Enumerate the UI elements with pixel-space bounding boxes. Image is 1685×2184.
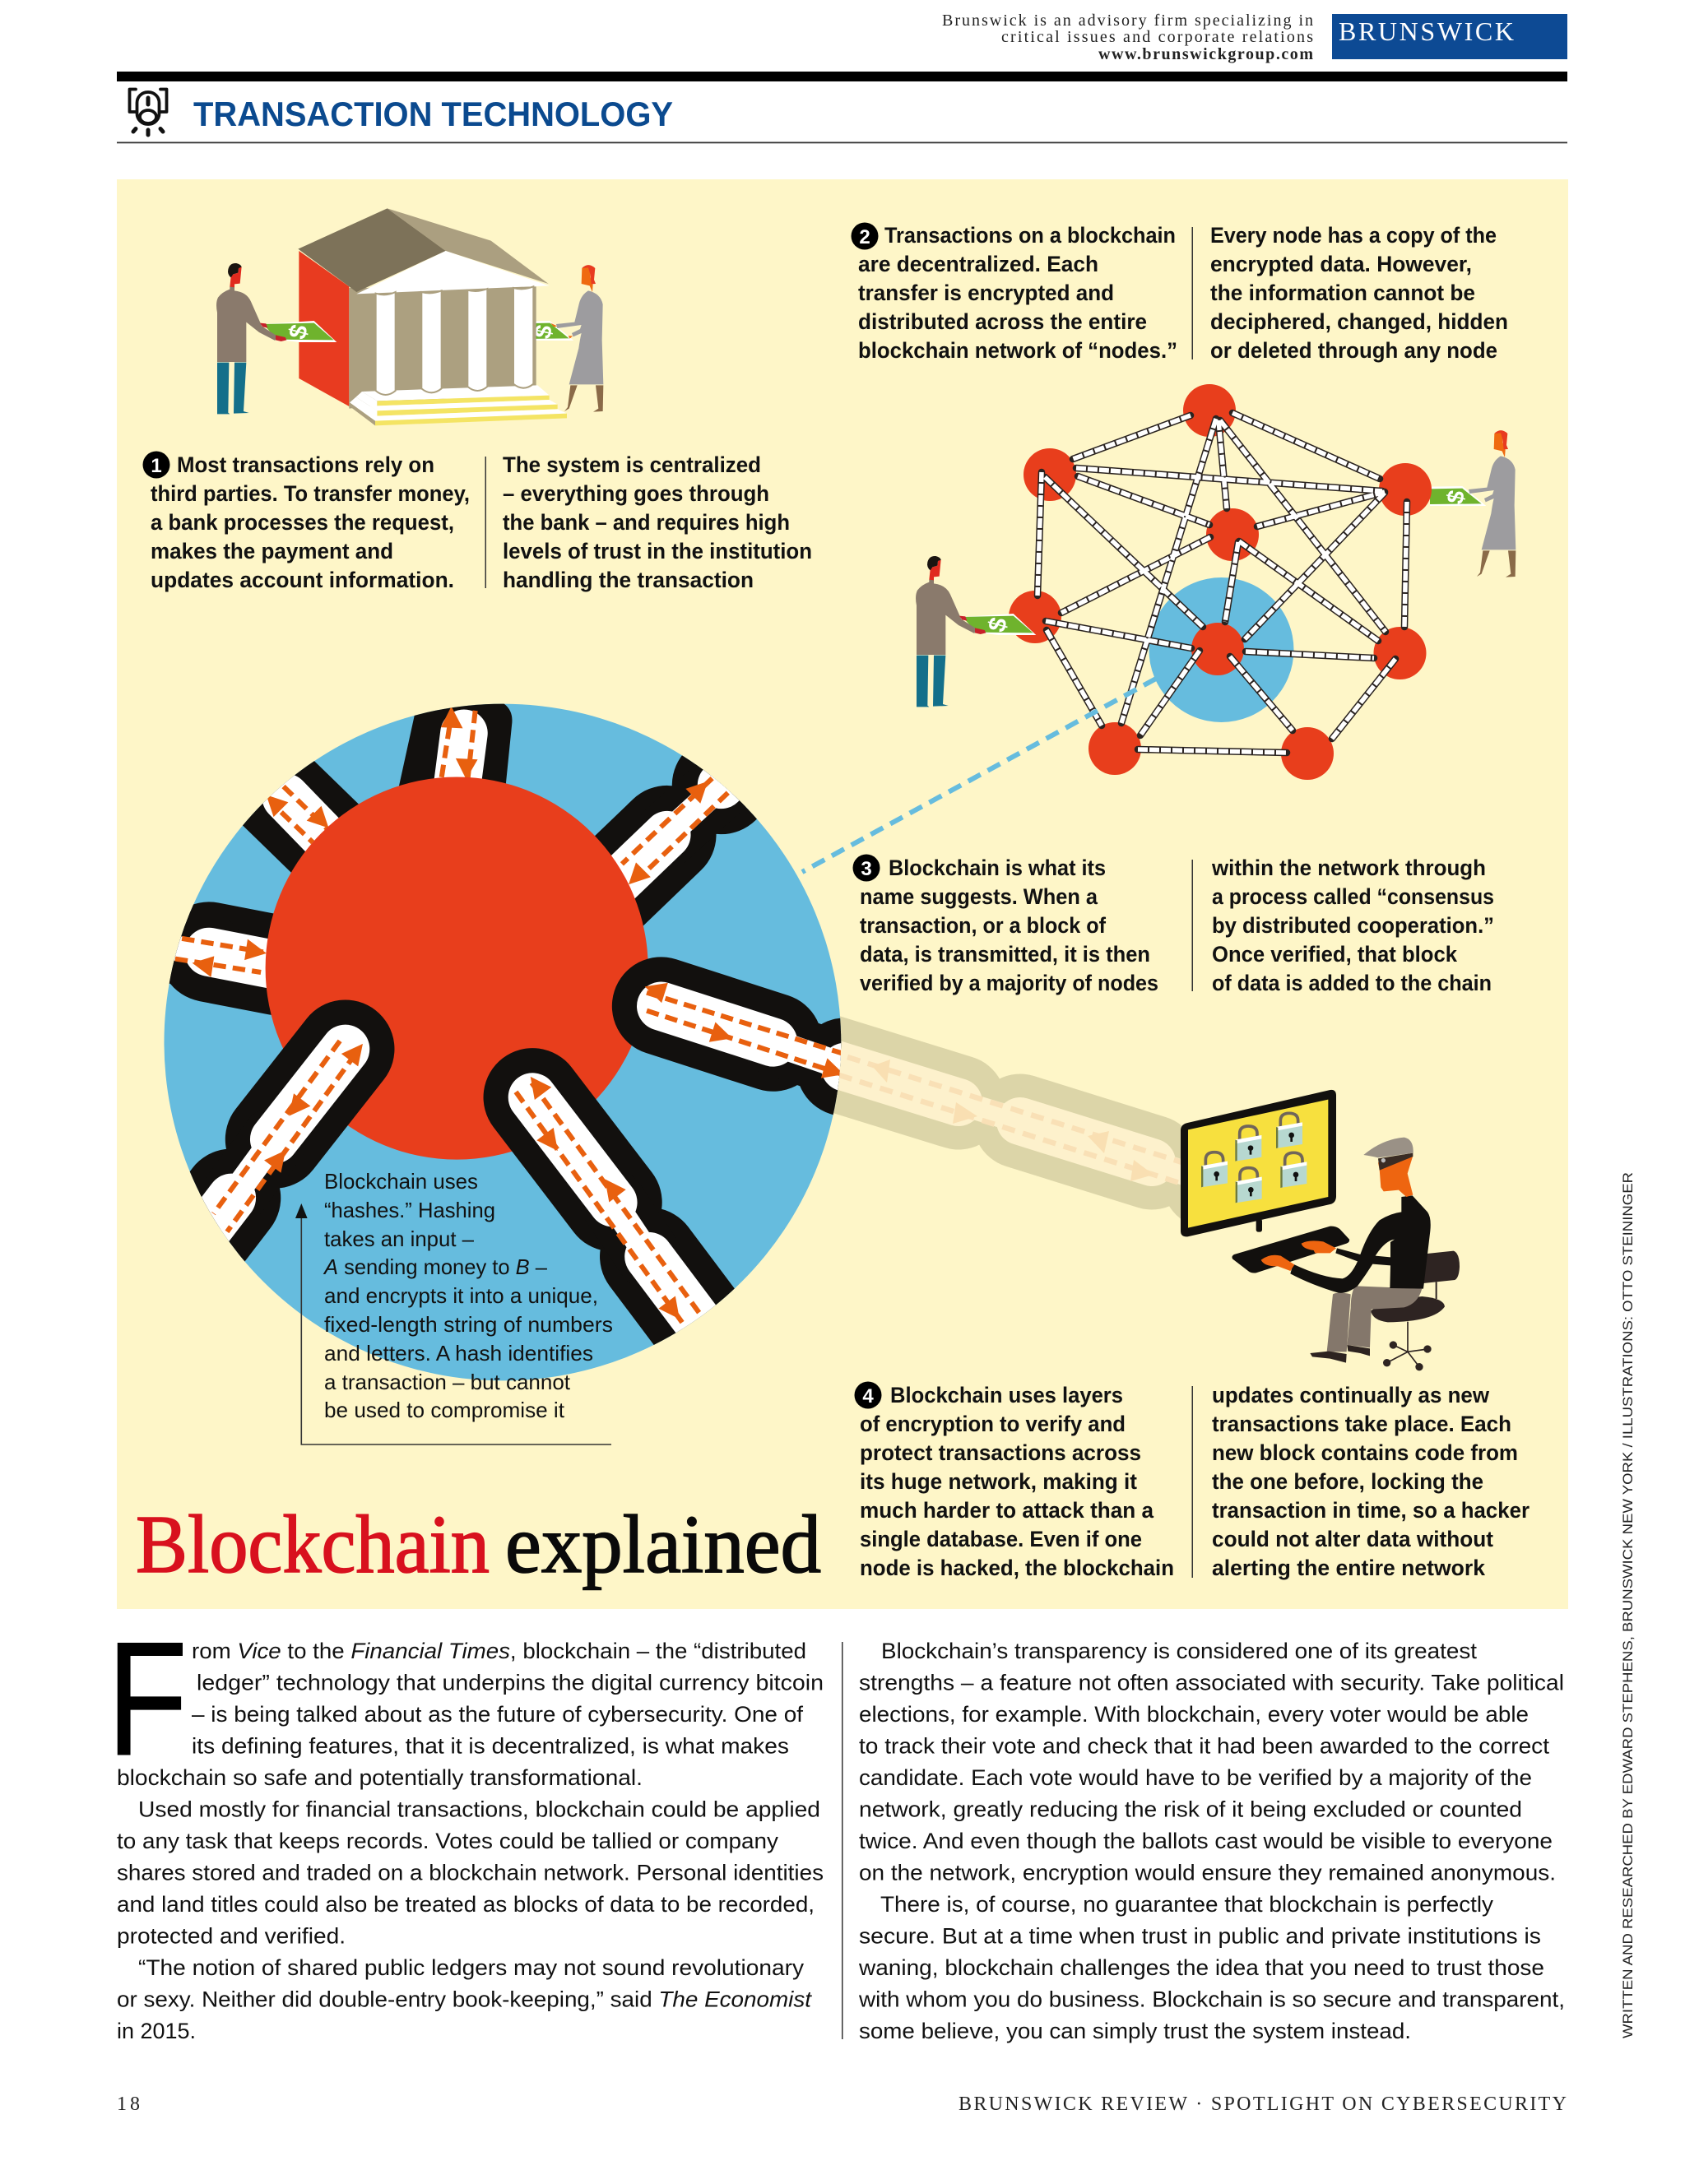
hacker mask xyxy=(1378,1153,1413,1171)
body text: left column: blockchain so safe and potentially transformational. xyxy=(117,1765,643,1790)
hash callout text: A sending money to B – xyxy=(323,1254,548,1279)
body text: left column: or sexy. Neither did double-entry book-keeping,” said The Economist xyxy=(117,1987,813,2012)
big circle detail xyxy=(164,704,841,1380)
number badge 1: 1 xyxy=(151,455,162,477)
step 4 text: transactions take place. Each xyxy=(1212,1412,1511,1436)
number badge 3 xyxy=(852,854,880,882)
hacker body xyxy=(1290,1195,1431,1293)
body text: left column: in 2015. xyxy=(117,2019,196,2043)
step 4 text: new block contains code from xyxy=(1212,1440,1518,1465)
hash callout text: fixed-length string of numbers xyxy=(324,1312,613,1337)
step 2 text: deciphered, changed, hidden xyxy=(1210,309,1508,334)
step 2 text: distributed across the entire xyxy=(858,309,1147,334)
man at network: $ xyxy=(983,614,1013,635)
body text: right column: Blockchain’s transparency is considered one of its greatest xyxy=(881,1639,1478,1663)
step 4 text: of encryption to verify and xyxy=(860,1412,1126,1436)
step 4 text: transaction in time, so a hacker xyxy=(1212,1498,1529,1523)
number badge 1 xyxy=(143,451,169,479)
step 4 text: single database. Even if one xyxy=(860,1527,1142,1551)
chain under hub: top-right xyxy=(595,755,757,926)
step 1 text: a bank processes the request, xyxy=(151,510,454,535)
masthead note xyxy=(942,12,1313,63)
step 1 text xyxy=(143,451,812,592)
body text: left column: its defining features, that it is decentralized, is what makes xyxy=(192,1734,789,1759)
bank columns xyxy=(376,286,533,395)
network chain links: outline xyxy=(1037,413,1407,753)
red hub xyxy=(266,777,648,1160)
body text: left column: to any task that keeps records. Votes could be tallied or company xyxy=(117,1829,779,1853)
step 3 text: of data is added to the chain xyxy=(1212,971,1492,995)
footer: BRUNSWICK REVIEW · SPOTLIGHT ON CYBERSECURITY xyxy=(959,2094,1567,2115)
step 1 text: third parties. To transfer money, xyxy=(151,481,470,506)
hash callout text: Blockchain uses xyxy=(324,1169,478,1194)
body text: left column: ledger” technology that underpins the digital currency bitcoin xyxy=(197,1670,824,1695)
panel: yellow background xyxy=(117,179,1568,1609)
monitor xyxy=(1181,1090,1336,1236)
number badge 2 xyxy=(851,222,879,250)
heading rule xyxy=(117,141,1567,143)
keyboard xyxy=(1232,1226,1349,1273)
step 3 text xyxy=(852,854,1494,995)
title xyxy=(136,1498,821,1590)
man at network xyxy=(916,556,1036,707)
chain link over hub: bottom-left xyxy=(179,1041,361,1266)
hash callout text: be used to compromise it xyxy=(324,1398,565,1422)
step 4 text: could not alter data without xyxy=(1212,1527,1493,1551)
step 2 text: Every node has a copy of the xyxy=(1210,223,1497,248)
dashed zoom line xyxy=(802,679,1156,872)
hacker hands xyxy=(1261,1240,1336,1271)
step 4 text: alerting the entire network xyxy=(1212,1556,1486,1580)
woman at network: $ xyxy=(1442,488,1470,507)
body text: left column: – is being talked about as the future of cybersecurity. One of xyxy=(192,1702,804,1727)
number badge 2: 2 xyxy=(859,226,870,248)
step 1 text: – everything goes through xyxy=(503,481,769,506)
step 4 text: protect transactions across xyxy=(860,1440,1141,1465)
bank building xyxy=(298,208,550,409)
hacker cap xyxy=(1363,1138,1413,1157)
title: explained xyxy=(505,1498,821,1590)
step 3 text: Blockchain is what its xyxy=(889,856,1106,880)
step 4 text: node is hacked, the blockchain xyxy=(860,1556,1174,1580)
step 2 text: transfer is encrypted and xyxy=(858,281,1114,305)
chain link over hub: bottom-right xyxy=(516,1078,735,1370)
masthead note: Brunswick is an advisory firm specializing in xyxy=(942,12,1313,30)
hacker eye xyxy=(1381,1158,1386,1162)
hash callout text: “hashes.” Hashing xyxy=(324,1198,495,1222)
drop cap: F xyxy=(107,1608,188,1789)
hash callout text: takes an input – xyxy=(324,1226,475,1251)
step 3 text: Once verified, that block xyxy=(1212,942,1458,967)
chain link over hub: right xyxy=(647,984,893,1083)
step 2 text: blockchain network of “nodes.” xyxy=(858,338,1177,363)
body text: right column: waning, blockchain challenges the idea that you need to trust those xyxy=(858,1955,1544,1980)
blue disc xyxy=(164,704,841,1380)
step 1 text: The system is centralized xyxy=(503,452,761,477)
body text: right column: strengths – a feature not often associated with security. Take political xyxy=(859,1670,1564,1695)
chain under hub: left xyxy=(121,939,279,976)
hash callout text: a transaction – but cannot xyxy=(324,1370,571,1394)
step 3 text: verified by a majority of nodes xyxy=(860,971,1158,995)
step 4 text: its huge network, making it xyxy=(860,1469,1137,1494)
hash callout text: and letters. A hash identifies xyxy=(324,1341,593,1366)
body text: right column: secure. But at a time when trust in public and private institutions is xyxy=(859,1923,1541,1948)
page number: 18 xyxy=(117,2094,140,2115)
masthead note: www.brunswickgroup.com xyxy=(1098,45,1313,63)
step 2 text: the information cannot be xyxy=(1210,281,1475,305)
padlocks on screen xyxy=(1201,1113,1307,1203)
hacker head xyxy=(1378,1156,1413,1197)
step 1 text: Most transactions rely on xyxy=(177,452,434,477)
body text: left column: Used mostly for financial transactions, blockchain could be applied xyxy=(138,1797,820,1821)
body text: right column xyxy=(858,1639,1565,2043)
step 2 text: or deleted through any node xyxy=(1210,338,1497,363)
body text: right column: network, greatly reducing the risk of it being excluded or counted xyxy=(859,1797,1522,1821)
step 3 text: a process called “consensus xyxy=(1212,884,1494,909)
bank steps xyxy=(350,385,567,425)
step 1 text: updates account information. xyxy=(151,568,454,592)
number badge 4 xyxy=(854,1382,882,1408)
step 4 text: much harder to attack than a xyxy=(860,1498,1154,1523)
chair xyxy=(1371,1251,1460,1370)
chain under hub: top-left xyxy=(261,776,346,860)
step 4 text xyxy=(854,1382,1529,1580)
blue highlight circle xyxy=(1149,577,1293,722)
network diagram xyxy=(1009,384,1432,780)
faded chain to hacker xyxy=(823,1057,1234,1189)
body text: left column: protected and verified. xyxy=(117,1923,346,1948)
step 2 text: Transactions on a blockchain xyxy=(884,223,1176,248)
step 1 text: handling the transaction xyxy=(503,568,754,592)
hacker legs xyxy=(1327,1286,1422,1352)
woman at network xyxy=(1430,430,1516,577)
number badge 4: 4 xyxy=(862,1385,874,1407)
body text: right column: twice. And even though the ballots cast would be visible to everyone xyxy=(859,1829,1553,1853)
icon: security scan head xyxy=(130,89,166,135)
section heading: TRANSACTION TECHNOLOGY xyxy=(193,95,673,133)
credit line: WRITTEN AND RESEARCHED BY EDWARD STEPHENS, BRUNSWICK NEW YORK / ILLUSTRATIONS: OTTO STEININGER xyxy=(1620,1172,1636,2038)
body text: right column: to track their vote and check that it had been awarded to the correct xyxy=(859,1734,1550,1759)
illustration: hacker at monitor xyxy=(1181,1090,1460,1370)
body text: right column: on the network, encryption would ensure they remained anonymous. xyxy=(859,1861,1556,1885)
body text: right column: some believe, you can simply trust the system instead. xyxy=(859,2019,1411,2043)
body text: right column: candidate. Each vote would have to be verified by a majority of the xyxy=(859,1765,1532,1790)
title: Blockchain xyxy=(136,1498,490,1590)
step 4 text: Blockchain uses layers xyxy=(890,1383,1123,1407)
logo: Brunswick xyxy=(1332,14,1567,59)
step 1 text: the bank – and requires high xyxy=(503,510,790,535)
network nodes xyxy=(1009,384,1432,780)
body text: right column: There is, of course, no guarantee that blockchain is perfectly xyxy=(880,1892,1494,1917)
step 3 text: name suggests. When a xyxy=(860,884,1098,909)
body text: right column: with whom you do business. Blockchain is so secure and transparent, xyxy=(858,1987,1565,2012)
step 2 text: are decentralized. Each xyxy=(858,252,1098,276)
masthead note: critical issues and corporate relations xyxy=(1001,28,1313,46)
man at bank: $ xyxy=(284,322,313,342)
step 2 text xyxy=(851,222,1508,363)
body text: left column xyxy=(107,1608,824,2043)
top rule xyxy=(117,72,1567,81)
step 3 text: by distributed cooperation.” xyxy=(1212,913,1494,938)
number badge 3: 3 xyxy=(861,858,872,880)
body text: left column: and land titles could also be treated as blocks of data to be recorded, xyxy=(117,1892,815,1917)
body text: left column: “The notion of shared public ledgers may not sound revolutionary xyxy=(138,1955,805,1980)
step 3 text: data, is transmitted, it is then xyxy=(860,942,1150,967)
network chain links: white segments xyxy=(1037,413,1407,753)
man at bank xyxy=(216,263,337,414)
logo: Brunswick: BRUNSWICK xyxy=(1339,16,1514,46)
hash callout text xyxy=(323,1169,613,1422)
step 1 text: makes the payment and xyxy=(151,539,393,563)
step 3 text: transaction, or a block of xyxy=(860,913,1107,938)
step 4 text: updates continually as new xyxy=(1212,1383,1490,1407)
illustration: bank with two people xyxy=(216,208,603,425)
body text: right column: elections, for example. With blockchain, every voter would be able xyxy=(859,1702,1529,1727)
woman at bank xyxy=(521,265,603,412)
step 4 text: the one before, locking the xyxy=(1212,1469,1483,1494)
step 2 text: encrypted data. However, xyxy=(1210,252,1472,276)
chain under hub: top xyxy=(399,704,512,786)
woman at bank: $ xyxy=(530,322,558,341)
hash callout text: and encrypts it into a unique, xyxy=(324,1283,598,1308)
step 1 text: levels of trust in the institution xyxy=(503,539,812,563)
hash callout arrow xyxy=(295,1203,611,1444)
body text: left column: rom Vice to the Financial Times, blockchain – the “distributed xyxy=(192,1639,806,1663)
step 3 text: within the network through xyxy=(1211,856,1486,880)
body text: left column: shares stored and traded on a blockchain network. Personal identities xyxy=(117,1861,824,1885)
hacker shoes xyxy=(1310,1345,1370,1363)
